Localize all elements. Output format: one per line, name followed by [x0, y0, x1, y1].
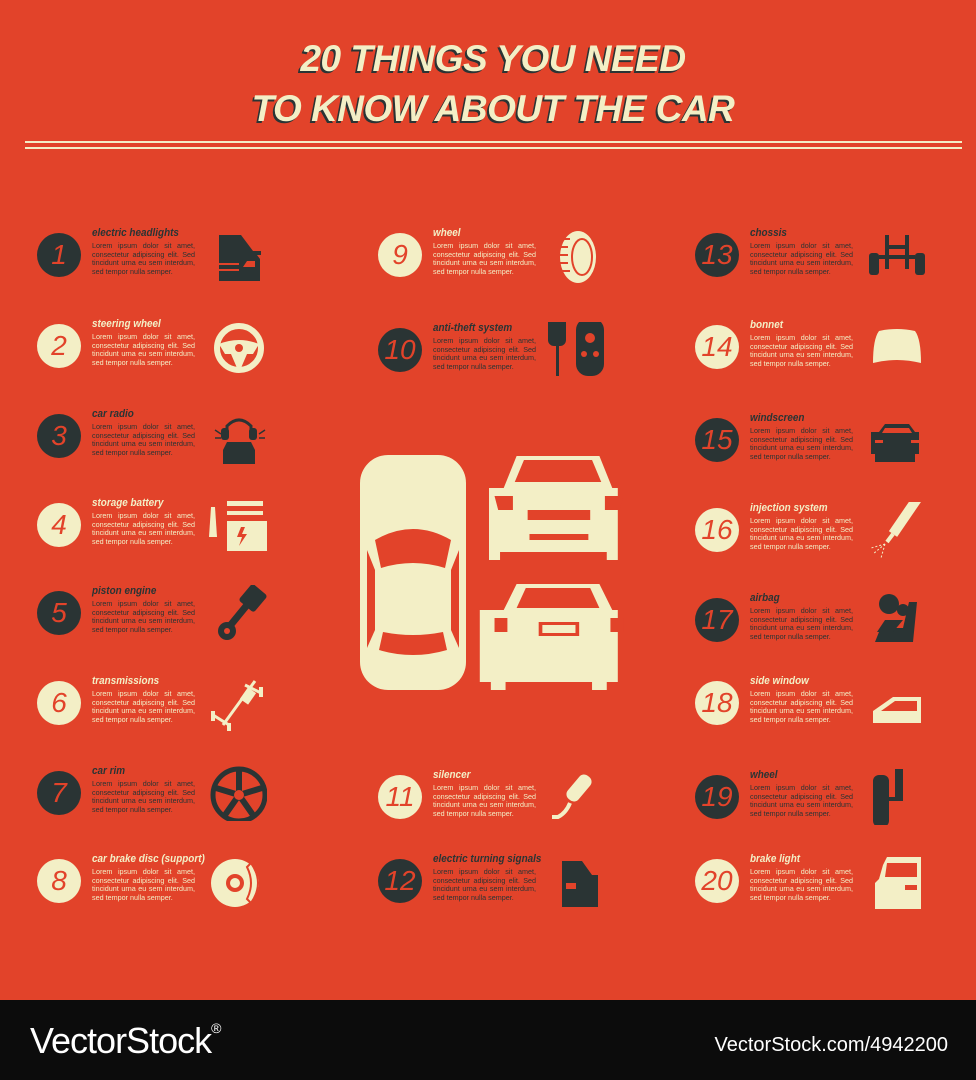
- icon: muffler: [552, 774, 592, 819]
- item 4: storage battery: Lorem ipsum dolor sit amet, consectetur adipiscing elit. Sed tincidunt urna eu sem interdum, sed tempor nulla semper.: [92, 511, 195, 546]
- item 7: car rim: [37, 765, 267, 821]
- item 15: windscreen: 15: [701, 424, 733, 455]
- item 8: car brake disc: Lorem ipsum dolor sit amet, consectetur adipiscing elit. Sed tincidunt urna eu sem interdum, sed tempor nulla semper.: [92, 867, 195, 902]
- item 4: storage battery: [37, 497, 267, 551]
- item 12: electric turning signals: 12: [384, 865, 416, 896]
- icon: side window: [873, 697, 921, 723]
- icon: chassis: [869, 235, 925, 275]
- item 1: electric headlights: Lorem ipsum dolor sit amet, consectetur adipiscing elit. Sed tincidunt urna eu sem interdum, sed tempor nulla semper.: [92, 241, 195, 276]
- item 13: chassis: 13: [701, 239, 733, 270]
- item 12: electric turning signals: Lorem ipsum dolor sit amet, consectetur adipiscing elit. Sed tincidunt urna eu sem interdum, sed tempor nulla semper.: [433, 867, 536, 902]
- item 16: injection system: injection system: [750, 502, 828, 514]
- icon: suspension: [873, 769, 903, 825]
- item 10: anti-theft system: 10: [384, 334, 416, 365]
- item 20: brake light: Lorem ipsum dolor sit amet, consectetur adipiscing elit. Sed tincidunt urna eu sem interdum, sed tempor nulla semper.: [750, 867, 853, 902]
- icon: car front headlight: [219, 235, 261, 281]
- item 20: brake light: [695, 853, 921, 909]
- item 12: electric turning signals: electric turning signals: [433, 853, 541, 865]
- item 7: car rim: Lorem ipsum dolor sit amet, consectetur adipiscing elit. Sed tincidunt urna eu sem interdum, sed tempor nulla semper.: [92, 779, 195, 814]
- item 2: steering wheel: Lorem ipsum dolor sit amet, consectetur adipiscing elit. Sed tincidunt urna eu sem interdum, sed tempor nulla semper.: [92, 332, 195, 366]
- item 8: car brake disc: [37, 853, 259, 907]
- title: 20 THINGS YOU NEED: [300, 38, 686, 79]
- item 10: anti-theft system: Lorem ipsum dolor sit amet, consectetur adipiscing elit. Sed tincidunt urna eu sem interdum, sed tempor nulla semper.: [433, 336, 536, 370]
- title: [252, 38, 735, 129]
- item 1: electric headlights: 1: [51, 239, 67, 270]
- item 11: silencer: Lorem ipsum dolor sit amet, consectetur adipiscing elit. Sed tincidunt urna eu sem interdum, sed tempor nulla semper.: [433, 783, 536, 818]
- item 6: transmissions: [37, 675, 263, 731]
- item 5: piston engine: piston engine: [92, 585, 156, 597]
- item 9: wheel: wheel: [433, 227, 461, 239]
- item 3: car radio: car radio: [92, 408, 134, 420]
- item 4: storage battery: storage battery: [92, 497, 164, 509]
- item 13: chassis: [695, 227, 925, 277]
- icon: battery: [209, 501, 267, 551]
- item 19: wheel suspension: Lorem ipsum dolor sit amet, consectetur adipiscing elit. Sed tincidunt urna eu sem interdum, sed tempor nulla semper.: [750, 783, 853, 818]
- item 15: windscreen: [695, 412, 919, 462]
- item 17: airbag: [695, 592, 917, 642]
- item 14: bonnet: [695, 319, 921, 369]
- item 1: electric headlights: [37, 227, 261, 281]
- item 20: brake light: 20: [701, 865, 733, 896]
- item 2: steering wheel: steering wheel: [92, 318, 161, 330]
- item 8: car brake disc: car brake disc (support): [92, 853, 205, 865]
- item 10: anti-theft system: anti-theft system: [433, 322, 512, 334]
- item 13: chassis: chossis: [750, 227, 787, 239]
- item 6: transmissions: transmissions: [92, 675, 159, 687]
- item 18: side window: [695, 675, 921, 725]
- front view car: [489, 456, 623, 560]
- item 16: injection system: [695, 502, 921, 558]
- icon: airbag: [875, 594, 917, 642]
- icon: piston: [218, 585, 266, 640]
- item 20: brake light: brake light: [750, 853, 800, 865]
- item 15: windscreen: Lorem ipsum dolor sit amet, consectetur adipiscing elit. Sed tincidunt urna eu sem interdum, sed tempor nulla semper.: [750, 426, 853, 460]
- center cars illustration: [355, 450, 630, 695]
- icon: drivetrain: [211, 680, 263, 731]
- item 18: side window: Lorem ipsum dolor sit amet, consectetur adipiscing elit. Sed tincidunt urna eu sem interdum, sed tempor nulla semper.: [750, 689, 853, 724]
- item 19: wheel suspension: 19: [701, 781, 733, 812]
- item 5: piston engine: Lorem ipsum dolor sit amet, consectetur adipiscing elit. Sed tincidunt urna eu sem interdum, sed tempor nulla semper.: [92, 599, 195, 634]
- item 10: anti-theft system: [378, 322, 604, 376]
- item 1: electric headlights: electric headlights: [92, 227, 179, 239]
- top view car: [360, 455, 466, 690]
- item 17: airbag: airbag: [750, 592, 780, 604]
- rear view car: [480, 584, 623, 690]
- item 9: wheel: [378, 227, 596, 283]
- item 2: steering wheel: [37, 318, 264, 373]
- item 15: windscreen: windscreen: [750, 412, 804, 424]
- item 5: piston engine: 5: [51, 597, 67, 628]
- item 6: transmissions: Lorem ipsum dolor sit amet, consectetur adipiscing elit. Sed tincidunt urna eu sem interdum, sed tempor nulla semper.: [92, 689, 195, 724]
- item 9: wheel: Lorem ipsum dolor sit amet, consectetur adipiscing elit. Sed tincidunt urna eu sem interdum, sed tempor nulla semper.: [433, 241, 536, 276]
- title: TO KNOW ABOUT THE CAR: [252, 88, 734, 129]
- item 16: injection system: Lorem ipsum dolor sit amet, consectetur adipiscing elit. Sed tincidunt urna eu sem interdum, sed tempor nulla semper.: [750, 516, 853, 550]
- footer: VectorStock bar: VectorStock®: [30, 1020, 220, 1061]
- item 17: airbag: 17: [701, 604, 733, 635]
- item 11: silencer: 11: [385, 781, 415, 812]
- item 11: silencer: [378, 769, 592, 819]
- icon: car key and remote: [548, 322, 604, 376]
- item 19: wheel suspension: wheel: [750, 769, 778, 781]
- icon: tire: [560, 231, 596, 283]
- item 3: car radio: Lorem ipsum dolor sit amet, consectetur adipiscing elit. Sed tincidunt urna eu sem interdum, sed tempor nulla semper.: [92, 422, 195, 456]
- icon: brake disc: [211, 859, 259, 907]
- icon: car front: [871, 424, 919, 462]
- item 18: side window: 18: [701, 687, 733, 718]
- footer: VectorStock bar: [0, 1000, 976, 1080]
- item 3: car radio: [37, 408, 266, 464]
- item 3: car radio: 3: [51, 420, 67, 451]
- item 14: bonnet: 14: [701, 331, 733, 362]
- icon: steering wheel: [214, 323, 264, 373]
- item 11: silencer: silencer: [433, 769, 470, 781]
- footer: VectorStock bar: VectorStock.com/4942200: [715, 1034, 948, 1056]
- icon: rear car: [865, 853, 925, 909]
- icon: injector: [872, 502, 921, 558]
- item 14: bonnet: bonnet: [750, 319, 783, 331]
- item 6: transmissions: 6: [51, 687, 67, 718]
- item 17: airbag: Lorem ipsum dolor sit amet, consectetur adipiscing elit. Sed tincidunt urna eu sem interdum, sed tempor nulla semper.: [750, 606, 853, 640]
- icon: car radio: [214, 418, 266, 464]
- item 2: steering wheel: 2: [51, 330, 67, 361]
- item 13: chassis: Lorem ipsum dolor sit amet, consectetur adipiscing elit. Sed tincidunt urna eu sem interdum, sed tempor nulla semper.: [750, 241, 853, 276]
- item 5: piston engine: [37, 585, 266, 640]
- icon: car turn signal: [562, 861, 598, 907]
- item 4: storage battery: 4: [51, 509, 67, 540]
- item 7: car rim: 7: [51, 777, 67, 808]
- item 19: wheel suspension: [695, 769, 903, 825]
- item 16: injection system: 16: [701, 514, 733, 545]
- item 14: bonnet: Lorem ipsum dolor sit amet, consectetur adipiscing elit. Sed tincidunt urna eu sem interdum, sed tempor nulla semper.: [750, 333, 853, 368]
- item 8: car brake disc: 8: [51, 865, 67, 896]
- item 7: car rim: car rim: [92, 765, 125, 777]
- item 9: wheel: 9: [392, 239, 408, 270]
- item 18: side window: side window: [750, 675, 809, 687]
- item 12: electric turning signals: [378, 853, 598, 907]
- icon: bonnet: [873, 329, 921, 363]
- icon: rim: [210, 766, 267, 821]
